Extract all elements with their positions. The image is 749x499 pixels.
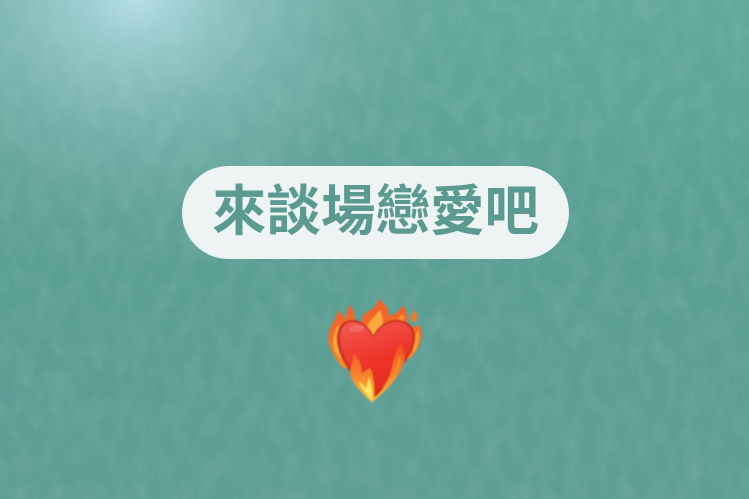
back flames bbox=[328, 299, 422, 368]
small flame spark bbox=[411, 309, 417, 322]
heart body bbox=[340, 322, 413, 400]
heart outline bbox=[337, 320, 415, 402]
title pill bbox=[182, 166, 569, 259]
icon: heart on fire bbox=[327, 298, 422, 403]
heart highlight bbox=[348, 324, 365, 333]
title text: 來談場戀愛吧 bbox=[212, 181, 539, 242]
front flames bbox=[350, 343, 404, 402]
flame right highlight bbox=[381, 356, 400, 392]
inner yellow flame bbox=[359, 377, 372, 400]
